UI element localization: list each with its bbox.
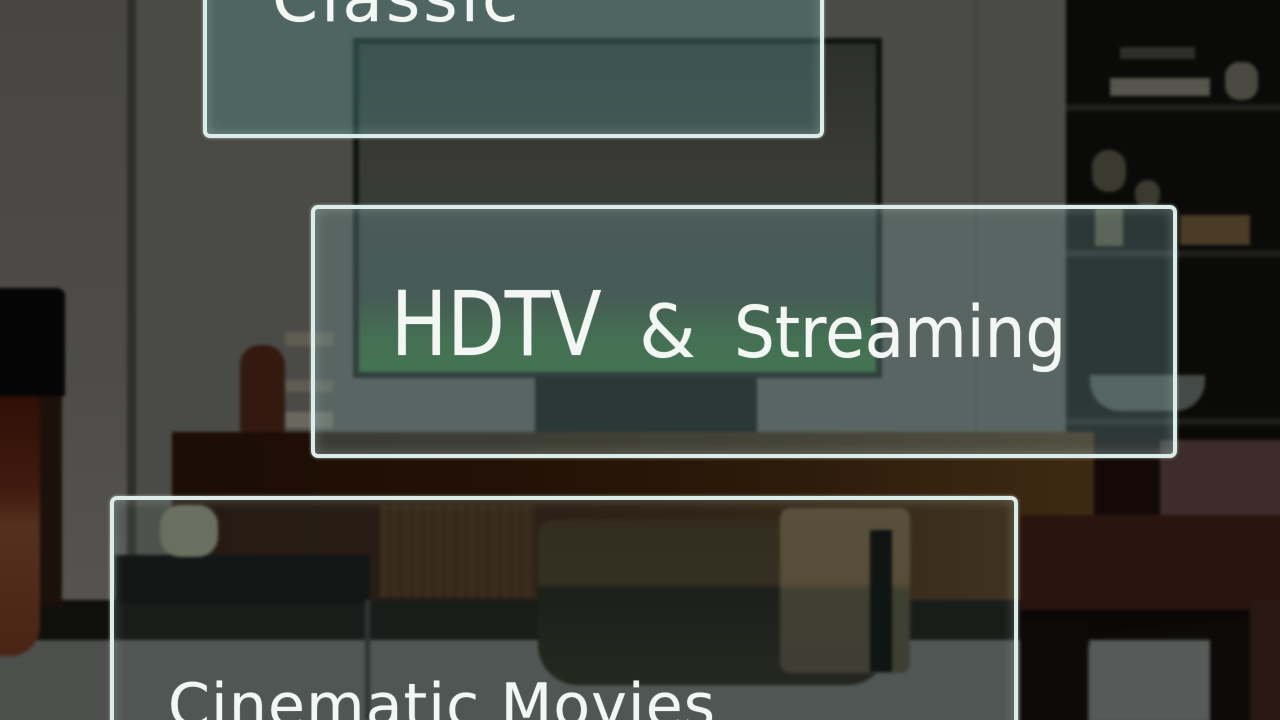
card: Cinematic Movies (110, 496, 1018, 720)
coffee table (538, 520, 888, 685)
label: HDTV & Streaming: & (639, 290, 696, 375)
card: Classic (203, 0, 824, 138)
side table (115, 555, 370, 603)
left armchair (0, 288, 65, 396)
sideboard (172, 432, 1094, 602)
card: HDTV & Streaming (311, 205, 1177, 458)
icon: television (353, 38, 882, 378)
floor (0, 600, 1280, 640)
label: HDTV & Streaming (391, 272, 1066, 376)
label: HDTV & Streaming: Streaming (734, 291, 1066, 374)
right armchair (1094, 440, 1280, 530)
label: HDTV & Streaming: HDTV (391, 272, 602, 376)
